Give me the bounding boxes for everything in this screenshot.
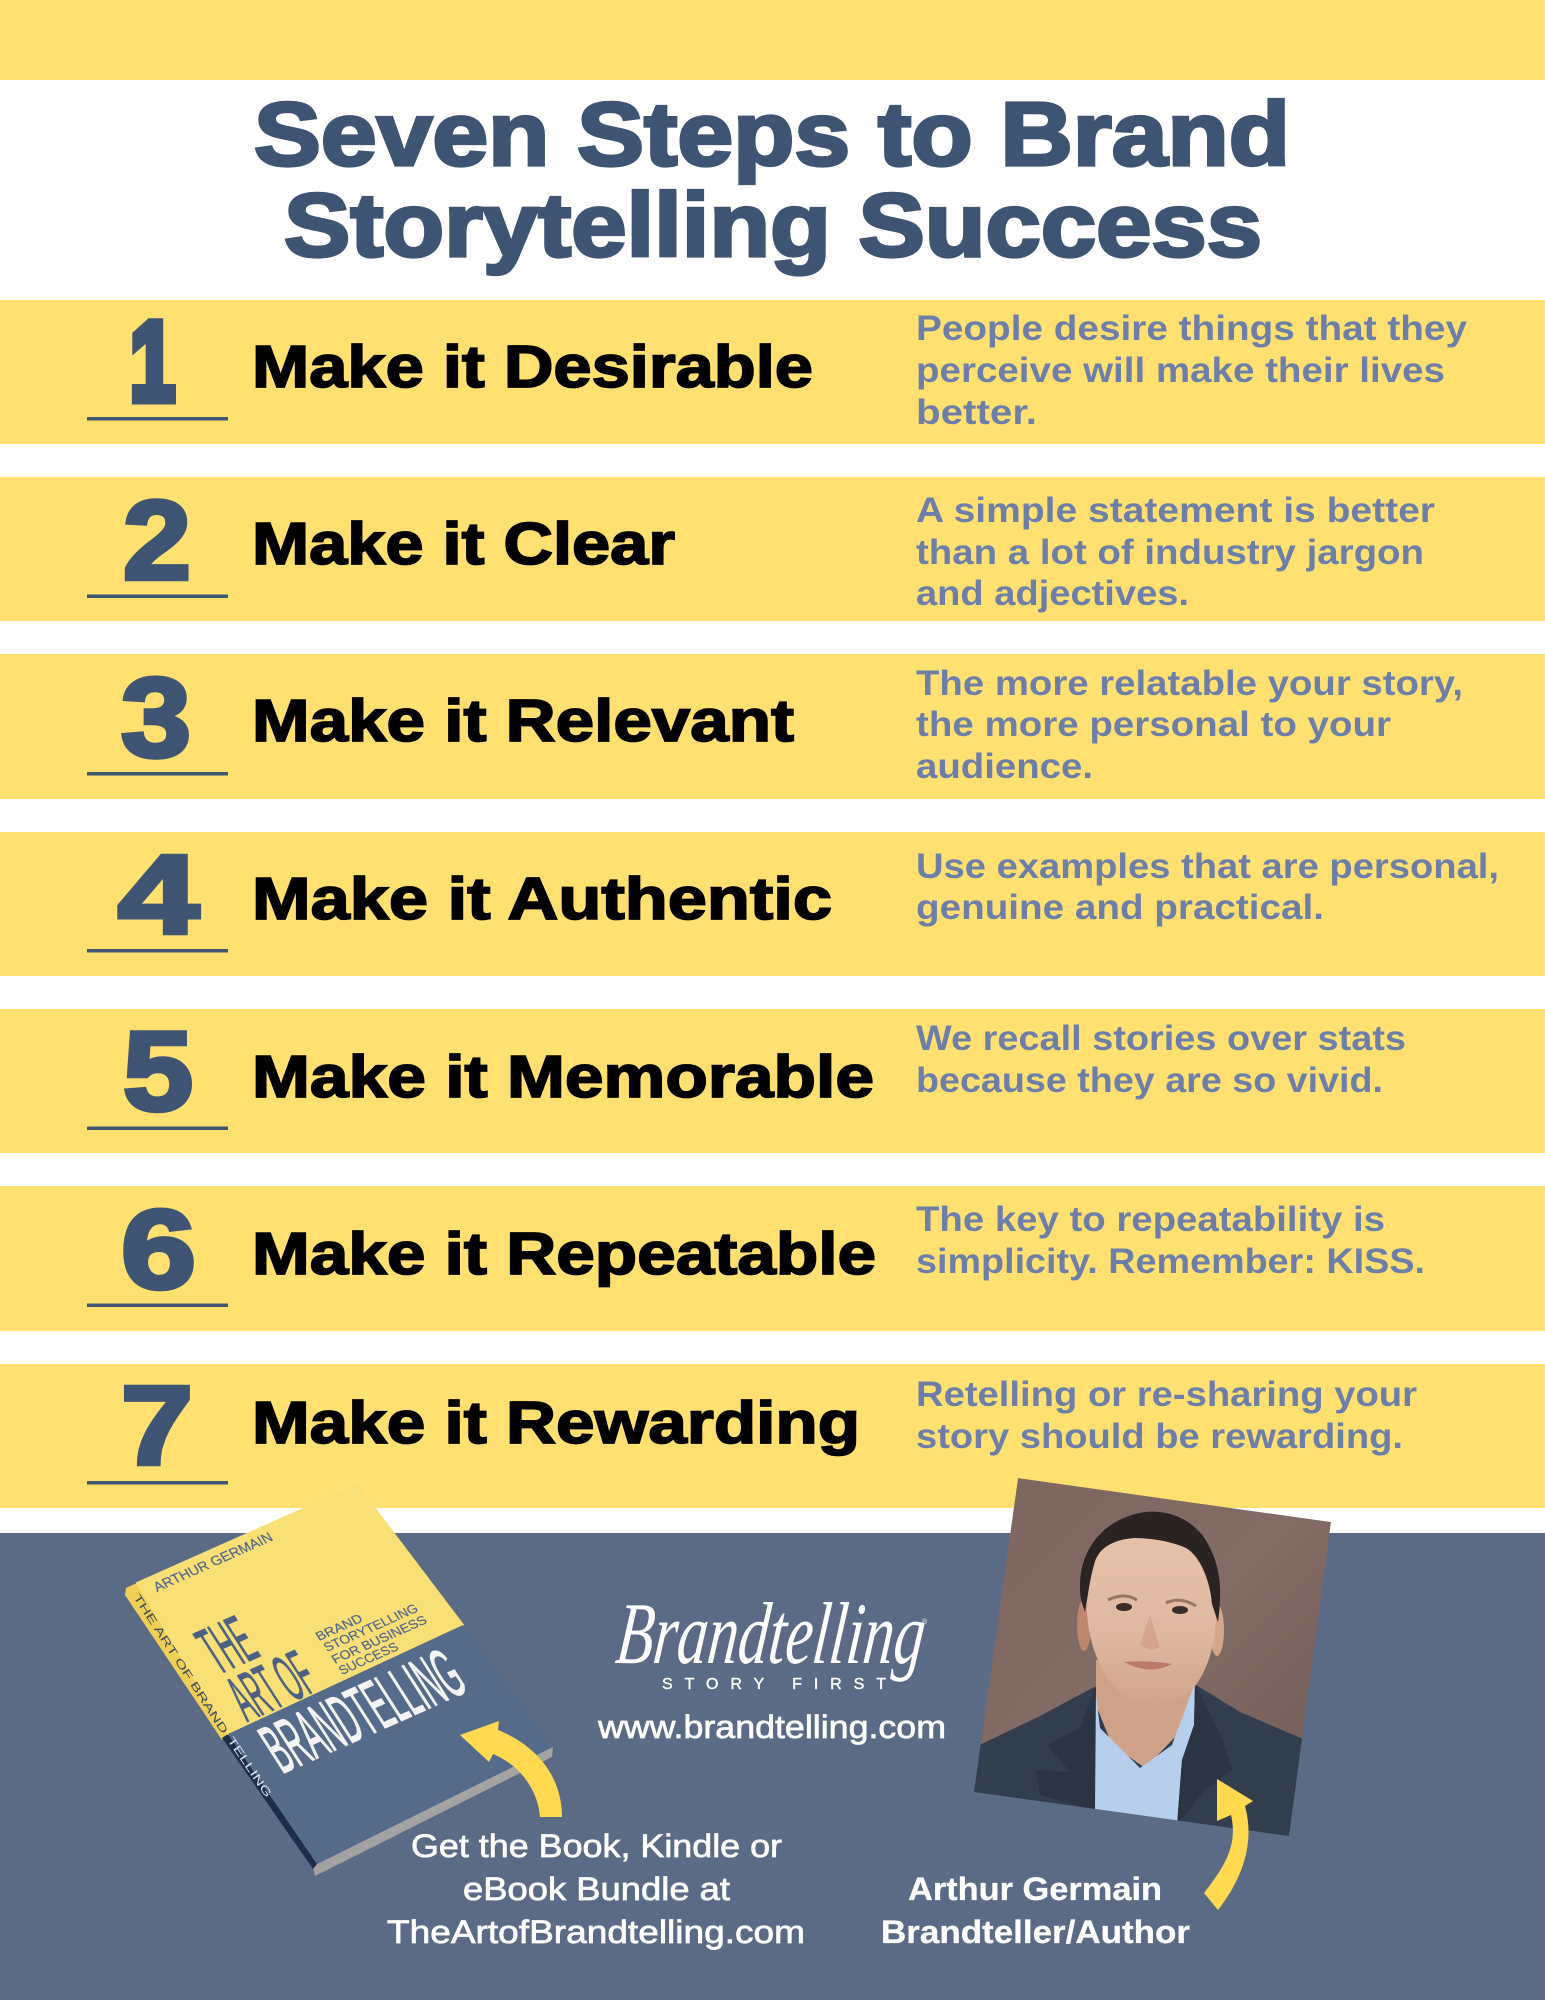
step 3 description	[916, 664, 1463, 786]
step 6 description	[916, 1200, 1425, 1281]
step 7 description: Retelling or re-sharing your	[916, 1375, 1417, 1414]
step 7 panel	[0, 1363, 1545, 1508]
step 4 description	[916, 847, 1499, 927]
jacket	[974, 1685, 1302, 1836]
author name: Arthur Germain	[908, 1871, 1162, 1907]
book spine text: THE ART OF BRAND	[130, 1592, 230, 1736]
facial features	[1108, 1596, 1196, 1670]
step 1 description	[916, 309, 1468, 432]
book subtitle: BRAND	[313, 1611, 365, 1644]
step 5 description: because they are so vivid.	[916, 1061, 1383, 1100]
step 4 description: genuine and practical.	[916, 888, 1324, 927]
brandtelling logo: Brandtelling	[612, 1585, 930, 1683]
book purchase text	[387, 1828, 805, 1950]
book subtitle: FOR BUSINESS	[329, 1612, 430, 1667]
website url: www.brandtelling.com	[597, 1709, 946, 1745]
step 2 description: and adjectives.	[916, 574, 1189, 613]
title: Storytelling Success	[284, 176, 1262, 276]
step 7 description	[916, 1375, 1417, 1456]
step 6 heading: Make it Repeatable	[252, 1221, 876, 1287]
step 6 number: 6	[121, 1187, 196, 1312]
book spine text	[130, 1592, 274, 1800]
step 7 number: 7	[121, 1363, 193, 1488]
book title: THE	[184, 1602, 270, 1688]
brandtelling logo: STORY FIRST	[662, 1676, 886, 1693]
lapels	[1036, 1686, 1096, 1810]
book title	[184, 1602, 479, 1787]
step 3 description: The more relatable your story,	[916, 664, 1463, 703]
arrow: points to author	[1204, 1779, 1253, 1910]
step 7 description: story should be rewarding.	[916, 1417, 1403, 1456]
book purchase text: eBook Bundle at	[463, 1871, 730, 1907]
step 4 description: Use examples that are personal,	[916, 847, 1499, 886]
step 1 description: better.	[916, 393, 1037, 432]
neck	[1096, 1660, 1194, 1768]
step 1 number: 1	[130, 299, 175, 424]
step 3 number: 3	[121, 655, 191, 780]
title	[254, 85, 1290, 276]
hair	[1080, 1512, 1220, 1622]
step 6 description: simplicity. Remember: KISS.	[916, 1242, 1425, 1281]
shirt	[1095, 1683, 1195, 1825]
step 2 description: than a lot of industry jargon	[916, 533, 1424, 572]
step 3 description: audience.	[916, 747, 1093, 786]
brandtelling logo: ®	[922, 1618, 928, 1626]
top yellow band	[0, 0, 1545, 80]
step 4 panel	[0, 832, 1545, 976]
brandtelling logo	[612, 1585, 930, 1693]
step 5 heading: Make it Memorable	[252, 1044, 874, 1110]
ears	[1077, 1599, 1091, 1651]
book subtitle	[313, 1601, 430, 1678]
book illustration	[125, 1485, 553, 1876]
step 5 description	[916, 1019, 1406, 1100]
step 5 panel	[0, 1009, 1545, 1153]
title: Seven Steps to Brand	[254, 85, 1290, 185]
step 1 panel	[0, 299, 1545, 444]
step 2 panel	[0, 477, 1545, 621]
step 2 description: A simple statement is better	[916, 491, 1435, 530]
step 5 number: 5	[123, 1009, 193, 1134]
author name: Brandteller/Author	[881, 1914, 1190, 1950]
step 5 description: We recall stories over stats	[916, 1019, 1406, 1058]
step 1 description: People desire things that they	[916, 309, 1468, 348]
step 2 description	[916, 491, 1435, 613]
book author: ARTHUR GERMAIN	[150, 1529, 275, 1595]
author photo	[965, 1478, 1331, 1845]
book subtitle: SUCCESS	[336, 1639, 401, 1678]
arrow: points to book	[460, 1721, 562, 1817]
face	[1086, 1538, 1216, 1690]
step 4 number: 4	[118, 832, 199, 957]
step 3 heading: Make it Relevant	[252, 688, 794, 754]
step 6 panel	[0, 1186, 1545, 1331]
author name	[881, 1871, 1190, 1950]
step 3 description: the more personal to your	[916, 705, 1391, 744]
book subtitle: STORYTELLING	[321, 1601, 421, 1655]
book spine text: TELLING	[225, 1735, 274, 1800]
step 7 heading: Make it Rewarding	[252, 1390, 860, 1456]
footer panel background	[0, 1533, 1545, 2000]
book title: ART OF	[214, 1638, 329, 1735]
step 6 description: The key to repeatability is	[916, 1200, 1385, 1239]
step 2 heading: Make it Clear	[252, 511, 675, 577]
step 3 panel	[0, 654, 1545, 799]
book purchase text: TheArtofBrandtelling.com	[387, 1914, 805, 1950]
step 4 heading: Make it Authentic	[252, 866, 832, 932]
step 2 number: 2	[123, 478, 191, 603]
step 1 description: perceive will make their lives	[916, 351, 1445, 390]
step 1 heading: Make it Desirable	[252, 334, 813, 400]
book purchase text: Get the Book, Kindle or	[411, 1828, 782, 1864]
book illustration: BRANDTELLING	[247, 1635, 479, 1787]
